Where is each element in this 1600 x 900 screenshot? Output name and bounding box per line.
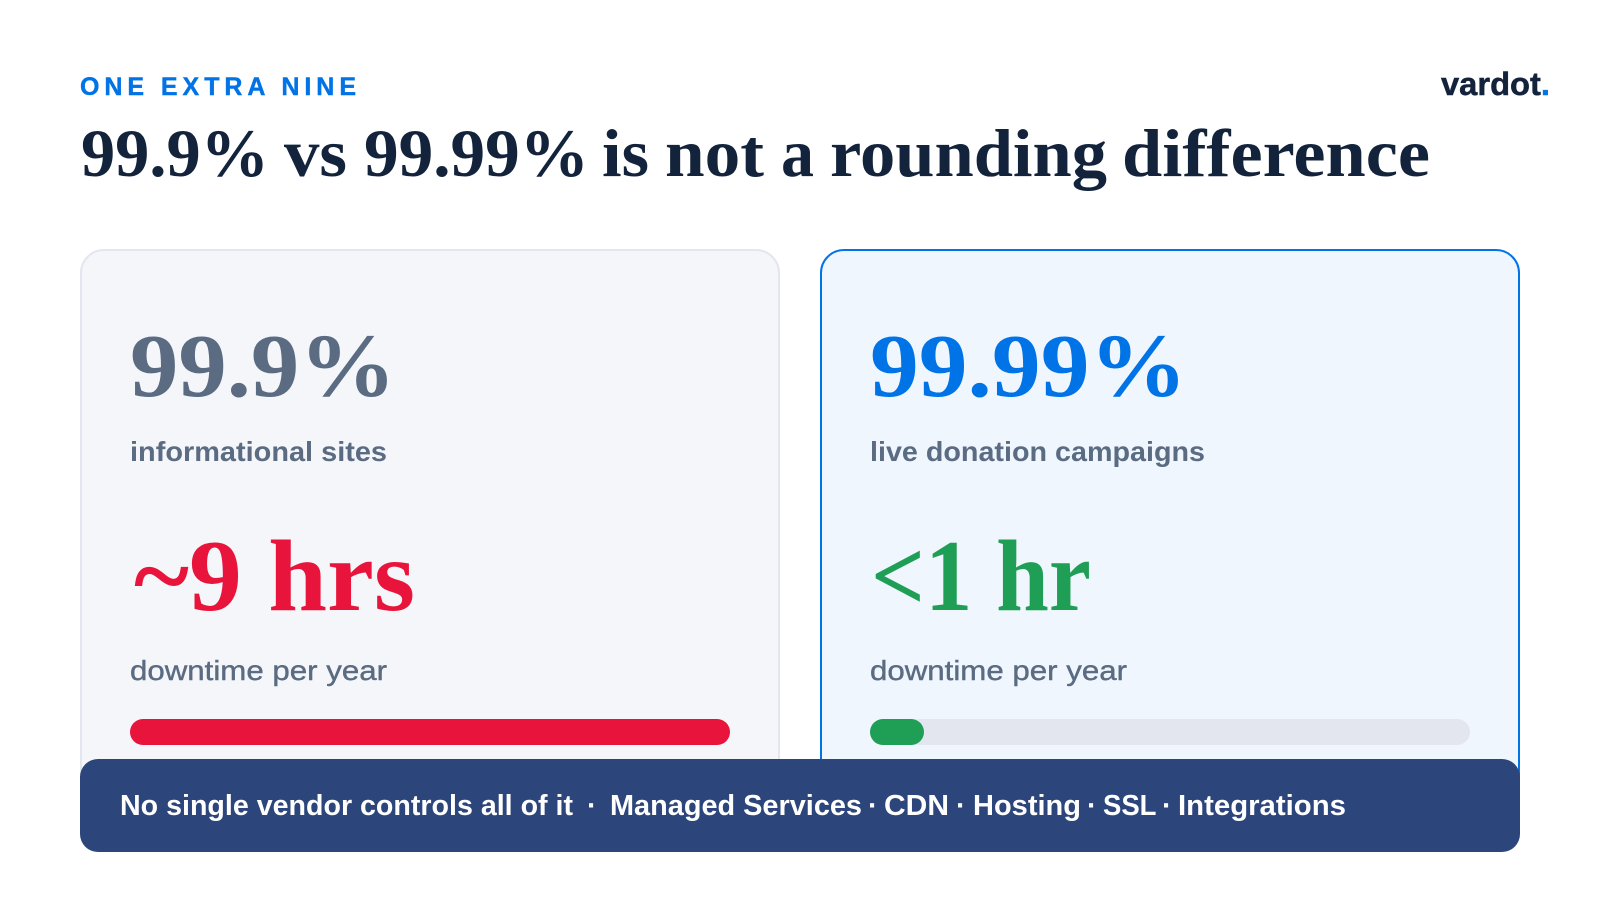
- banner text: No single vendor controls all of it: [120, 790, 573, 822]
- downtime bar: full red: [130, 719, 730, 745]
- downtime bar: track with small green fill: [870, 719, 1470, 745]
- banner text: ·: [956, 790, 966, 822]
- title: 99.9%: [81, 115, 269, 191]
- title: is: [602, 115, 649, 191]
- title: vs: [284, 115, 347, 191]
- stat: under 1 hour: <1 hr: [871, 520, 1091, 633]
- title: difference: [1122, 115, 1430, 191]
- banner background: [80, 759, 1520, 852]
- banner text: ·: [868, 790, 878, 822]
- eyebrow label: ONE EXTRA NINE: [80, 73, 356, 101]
- banner text: CDN: [884, 790, 949, 822]
- card background: left: [81, 250, 779, 850]
- panel: 99.99% live donation campaigns: [821, 250, 1519, 850]
- title: a: [781, 115, 814, 191]
- banner text: Hosting: [973, 790, 1081, 822]
- logo: vardot: vardot.: [1441, 66, 1550, 102]
- label: downtime per year: downtime per year: [870, 655, 1127, 686]
- label: downtime per year: downtime per year: [130, 655, 387, 686]
- banner text: ·: [587, 790, 597, 822]
- panel: 99.9% informational sites: [81, 250, 779, 850]
- banner text: ·: [1162, 790, 1172, 822]
- stat: 99.9%: 99.9%: [130, 317, 396, 416]
- title: not: [665, 115, 764, 191]
- banner text: ·: [1087, 790, 1097, 822]
- card background: right: [821, 250, 1519, 850]
- banner: [80, 759, 1520, 852]
- banner text: SSL: [1103, 790, 1156, 822]
- stat: about 9 hours: ~9 hrs: [134, 520, 415, 633]
- title: rounding: [830, 115, 1107, 191]
- title: 99.99%: [364, 115, 589, 191]
- label: informational sites: informational sites: [130, 436, 387, 467]
- banner text: Integrations: [1178, 790, 1346, 822]
- stat: 99.99%: 99.99%: [870, 317, 1187, 416]
- banner text: Managed Services: [610, 790, 862, 822]
- label: live donation campaigns: live donation campaigns: [870, 436, 1205, 467]
